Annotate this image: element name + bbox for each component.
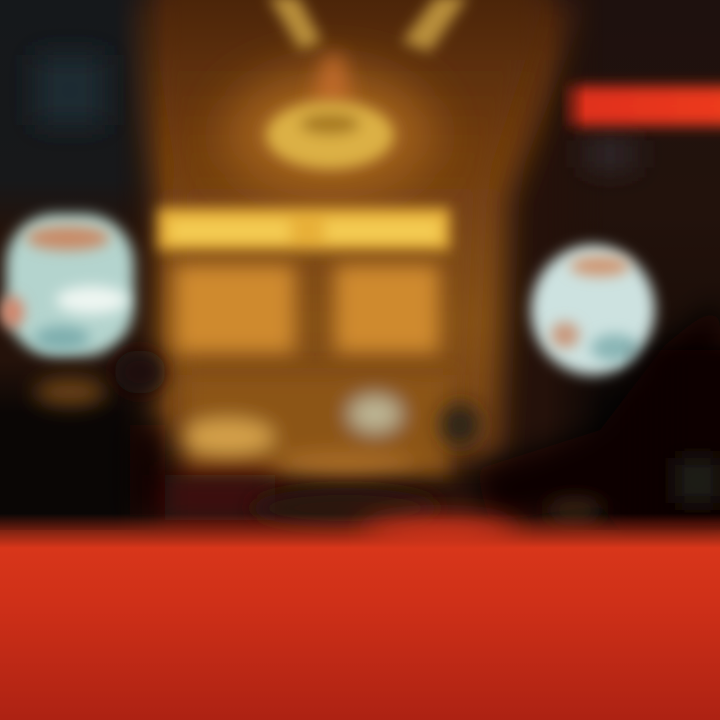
- icon: red neon sign: [560, 86, 720, 126]
- panel: dark silhouettes right: [475, 300, 720, 530]
- panel: dark silhouettes left: [34, 350, 275, 520]
- icon: ring chandelier: [266, 101, 394, 169]
- panel: right round screen: [531, 245, 655, 375]
- panel: warm glow behind chandelier: [225, 70, 435, 200]
- panel: dark silhouettes centre: [250, 403, 480, 528]
- panel: red carpet floor: [0, 505, 720, 720]
- icon: chandelier stem: [312, 55, 352, 105]
- panel: orange booth right: [335, 265, 439, 353]
- panel: orange booth left: [175, 265, 295, 353]
- panel: dark left column: [0, 0, 170, 530]
- panel: left round screen: [0, 214, 134, 356]
- icon: ceiling lights: [268, 0, 468, 52]
- panel: glowing yellow band: [158, 208, 450, 250]
- panel: dark right column: [556, 0, 672, 530]
- background wall: [128, 0, 578, 472]
- panel: lower counter area: [182, 375, 450, 478]
